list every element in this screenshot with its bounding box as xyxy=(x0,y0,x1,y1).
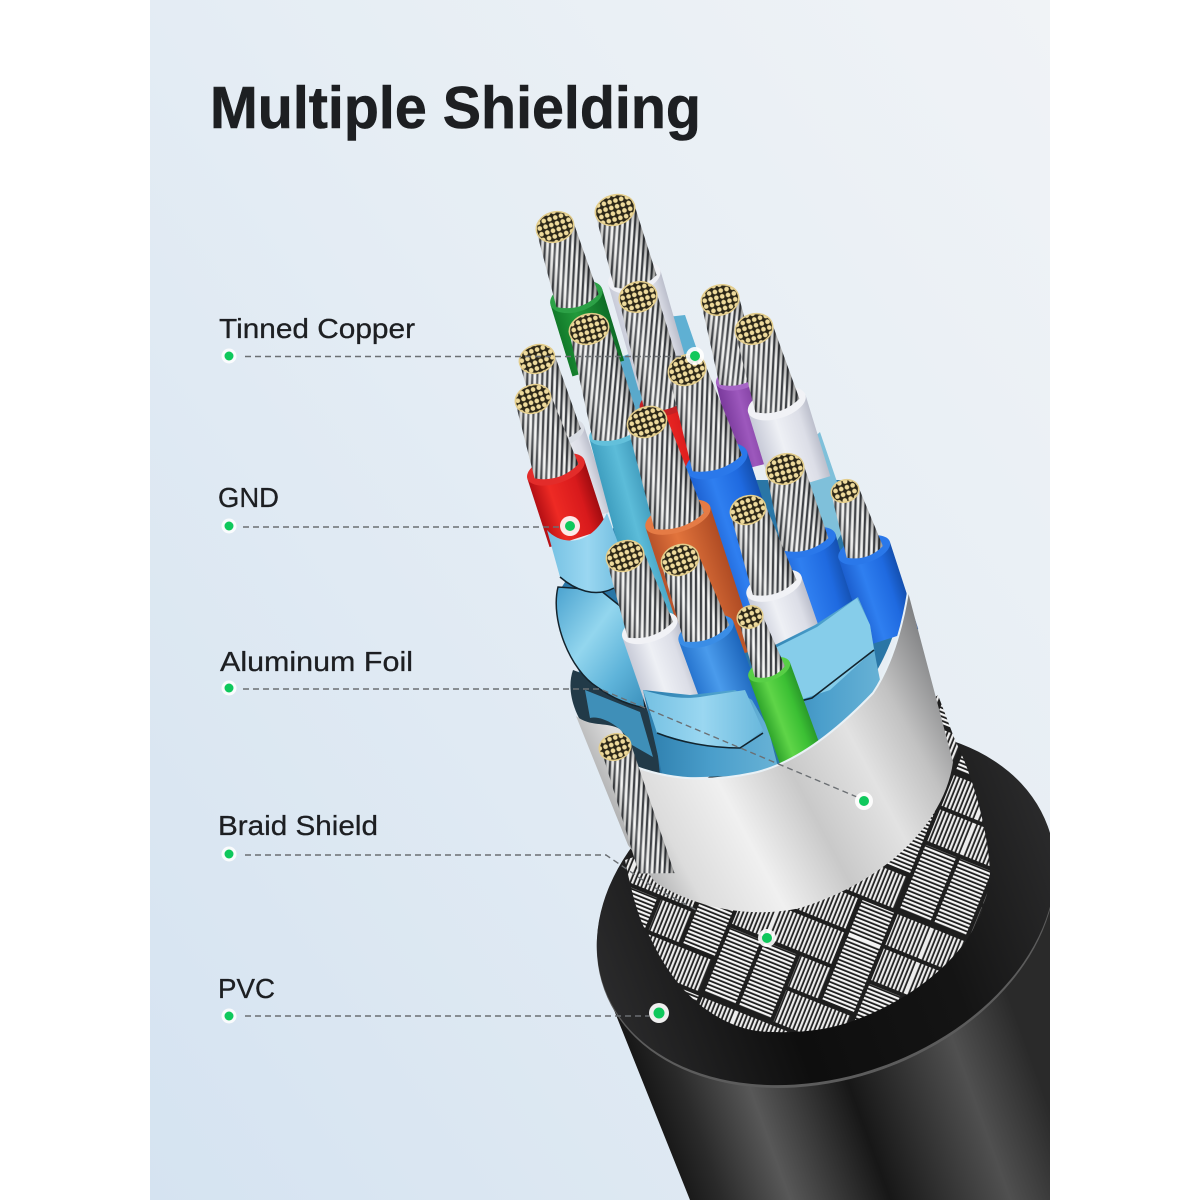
braid shield xyxy=(620,690,1000,1040)
label: Aluminum Foil xyxy=(220,646,873,810)
wire: white centre right xyxy=(730,494,818,645)
wire: pale grey left xyxy=(518,344,609,514)
wire: white lower xyxy=(606,540,698,714)
label: Braid Shield: Braid Shield xyxy=(218,810,378,841)
wire: white back xyxy=(594,194,684,390)
wire: blue right xyxy=(766,452,852,624)
label: PVC: PVC xyxy=(218,973,275,1004)
label: Braid Shield xyxy=(218,810,776,947)
wire: red left xyxy=(514,384,604,548)
wire: blue lower xyxy=(660,544,760,708)
label: Tinned Copper: Tinned Copper xyxy=(219,313,415,344)
wire: white right xyxy=(734,312,830,482)
label: PVC xyxy=(218,973,669,1024)
wire: blue centre xyxy=(668,354,762,608)
infographic canvas xyxy=(150,0,1050,1200)
label: GND xyxy=(218,482,580,536)
wire: green back xyxy=(536,210,624,376)
aluminum foil shield xyxy=(576,592,953,912)
wire: teal xyxy=(568,312,674,614)
wire: purple xyxy=(700,284,764,468)
label: GND: GND xyxy=(218,482,279,513)
wire: small green front xyxy=(736,605,818,763)
PVC jacket body xyxy=(614,910,1050,1200)
wire: red centre xyxy=(618,280,690,467)
cable illustration xyxy=(500,188,1106,1200)
PVC jacket face xyxy=(596,742,1050,1088)
back foil ribbons xyxy=(620,315,841,540)
label: Aluminum Foil: Aluminum Foil xyxy=(220,646,413,677)
label: Tinned Copper xyxy=(219,313,704,365)
foil wrap left xyxy=(547,513,660,775)
front foil ribbons xyxy=(643,597,884,778)
background panel xyxy=(150,0,1050,1200)
cavity behind wires xyxy=(560,480,905,775)
wire: blue far right xyxy=(830,478,918,644)
title: Multiple Shielding xyxy=(210,75,701,141)
drain wire xyxy=(598,732,674,874)
wire: orange xyxy=(626,406,748,654)
